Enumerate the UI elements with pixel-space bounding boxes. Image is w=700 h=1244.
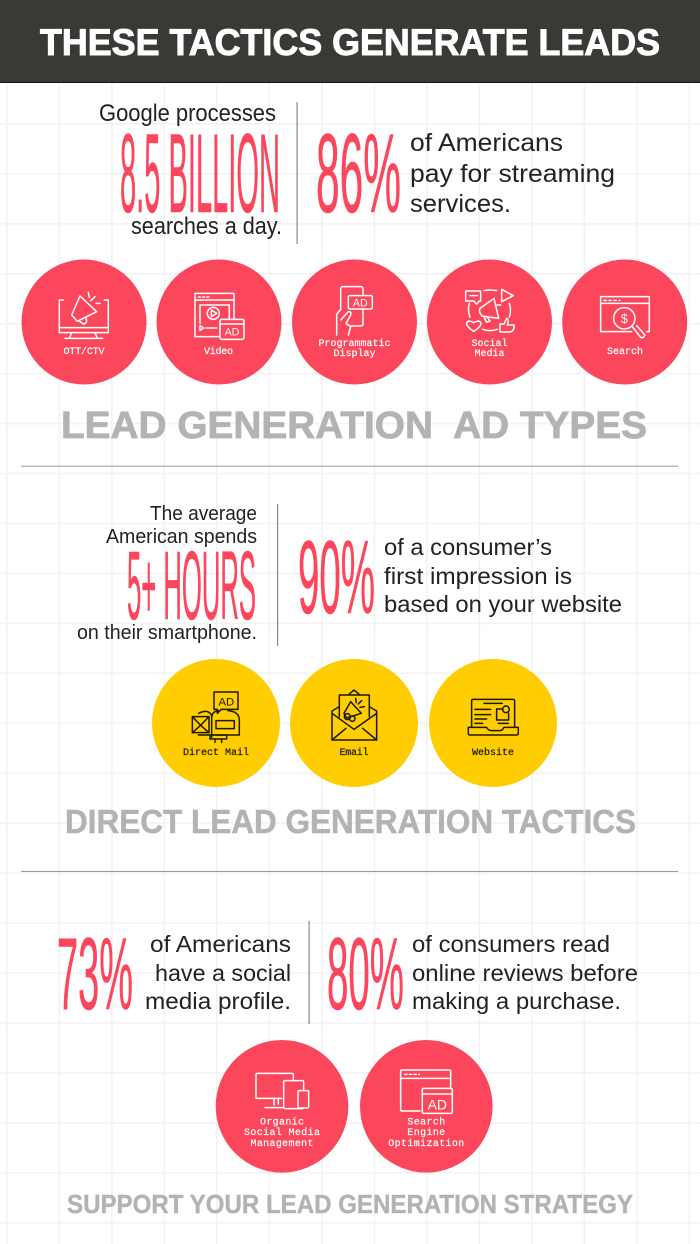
icon: programmatic display: AD xyxy=(353,297,368,309)
icon: direct mail: AD xyxy=(218,697,234,709)
header banner xyxy=(0,0,700,83)
heading: support your lead generation strategy: SUPPORT YOUR LEAD GENERATION STRATEGY xyxy=(67,1189,633,1219)
stat: 80% online reviews: online reviews before xyxy=(412,960,638,986)
icon: organic social media management: Management xyxy=(250,1139,314,1150)
icon: website xyxy=(429,659,557,787)
icon: programmatic display xyxy=(292,260,417,384)
stat: 5+ hours on smartphone: American spends xyxy=(106,526,257,548)
icon: video: AD xyxy=(225,327,240,339)
stat: 73% social media profile: of Americans xyxy=(150,931,291,957)
icon: direct mail xyxy=(152,659,280,787)
icon: search xyxy=(562,260,687,384)
title: THESE TACTICS GENERATE LEADS xyxy=(40,22,660,63)
stat: 80% online reviews: making a purchase. xyxy=(412,988,621,1014)
icon: OTT/CTV xyxy=(22,260,146,384)
stat: 86% streaming: pay for streaming xyxy=(410,160,615,188)
icon: search engine optimization: Optimization xyxy=(388,1138,464,1150)
panel: support your lead generation strategy xyxy=(57,917,638,1219)
stat: 8.5 billion searches: Google processes xyxy=(99,100,276,127)
stat: 80% online reviews: 80% xyxy=(327,917,404,1031)
icon: search engine optimization: Engine xyxy=(407,1127,445,1139)
icon: video: Video xyxy=(204,346,233,358)
icon: search engine optimization: AD xyxy=(428,1096,447,1112)
icon: email: Email xyxy=(340,747,368,759)
stat: 86% streaming: 86% xyxy=(316,111,401,236)
stat: 86% streaming: services. xyxy=(410,190,511,218)
stat: 73% social media profile: have a social xyxy=(155,960,291,986)
stat: 8.5 billion searches xyxy=(99,100,282,240)
stat: 5+ hours on smartphone xyxy=(77,503,257,644)
icon: website: Website xyxy=(472,747,514,759)
icon: organic social media management: Organic xyxy=(260,1116,304,1128)
icon: programmatic display: Programmatic xyxy=(318,338,390,350)
icon: OTT/CTV: OTT/CTV xyxy=(64,346,104,358)
icon: organic social media management: Social Media xyxy=(244,1127,320,1139)
icon: search: $ xyxy=(621,312,628,326)
icon: organic social media management xyxy=(216,1040,348,1173)
icon: video xyxy=(156,260,282,384)
stat: 5+ hours on smartphone: The average xyxy=(150,503,257,525)
stat: 86% streaming: of Americans xyxy=(410,129,563,157)
heading: lead generation ad types: LEAD GENERATION AD TYPES xyxy=(61,405,647,447)
icon: direct mail: Direct Mail xyxy=(183,747,249,759)
stat: 8.5 billion searches: searches a day. xyxy=(131,213,282,240)
stat: 90% first impression: first impression is xyxy=(384,563,572,589)
stat: 5+ hours on smartphone: on their smartphone. xyxy=(77,622,257,644)
panel: direct lead generation tactics xyxy=(65,503,636,840)
panel: direct lead generation tactics: 5+ HOURS xyxy=(127,531,256,640)
stat: 73% social media profile: 73% xyxy=(57,917,133,1031)
icon: social media xyxy=(427,260,552,384)
stat: 80% online reviews xyxy=(327,917,638,1031)
stat: 90% first impression: 90% xyxy=(298,520,375,636)
icon: email xyxy=(290,659,418,787)
heading: direct lead generation tactics: DIRECT LEAD GENERATION TACTICS xyxy=(65,803,636,840)
stat: 80% online reviews: of consumers read xyxy=(412,931,610,957)
panel: lead generation ad types xyxy=(22,100,687,447)
stat: 90% first impression xyxy=(298,520,622,636)
icon: search engine optimization xyxy=(360,1040,493,1173)
icon: social media: Media xyxy=(474,348,504,360)
icon: programmatic display: Display xyxy=(334,348,376,360)
stat: 90% first impression: based on your website xyxy=(384,591,622,617)
icon: search engine optimization: Search xyxy=(407,1116,445,1128)
icon: social media: Social xyxy=(472,338,508,350)
icon: search: Search xyxy=(607,346,643,358)
stat: 73% social media profile: media profile. xyxy=(145,988,291,1014)
stat: 90% first impression: of a consumer’s xyxy=(384,534,552,560)
